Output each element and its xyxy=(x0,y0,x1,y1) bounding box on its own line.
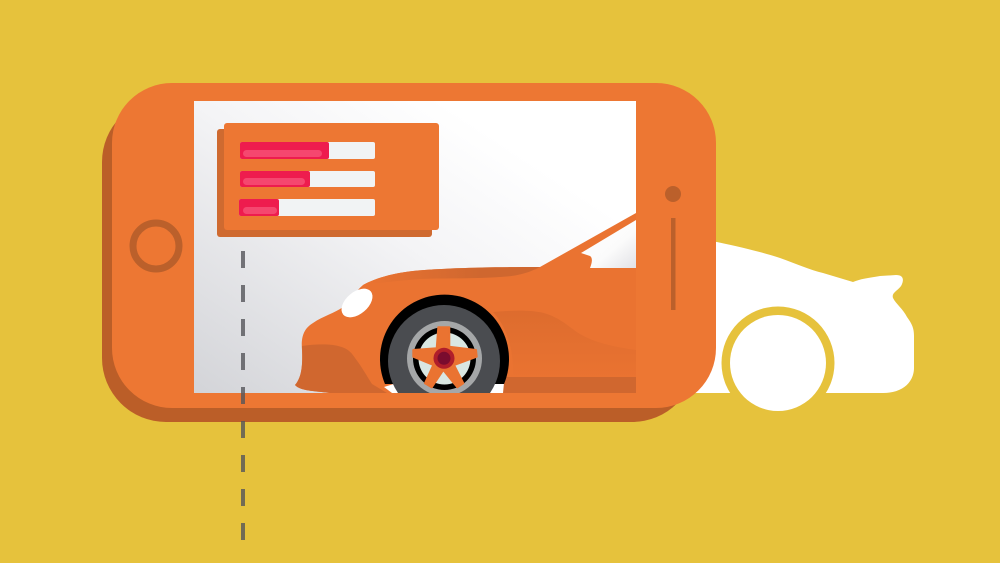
hub xyxy=(434,348,454,369)
data panel xyxy=(217,123,439,237)
phone xyxy=(102,83,716,422)
bar 3 xyxy=(239,199,375,216)
windshield glass xyxy=(606,237,636,268)
bar 1 xyxy=(240,142,375,159)
side shade xyxy=(494,310,582,336)
sill shade xyxy=(495,377,636,393)
spokes xyxy=(413,327,477,387)
home button xyxy=(133,223,179,269)
camera dot xyxy=(665,186,681,202)
panel face xyxy=(224,123,439,230)
car body xyxy=(295,213,636,393)
hood shade xyxy=(363,267,540,285)
orange car seen through screen xyxy=(295,213,636,393)
dashed pointer line xyxy=(241,251,245,541)
phone body xyxy=(112,83,716,408)
bar 2 xyxy=(240,171,375,187)
front bumper shade xyxy=(295,344,387,393)
white car silhouette: rear half xyxy=(690,240,914,420)
screen xyxy=(194,101,636,393)
rear wheel xyxy=(722,306,834,420)
front wheel xyxy=(380,294,509,393)
headlight xyxy=(342,288,372,318)
phone shadow xyxy=(102,98,696,422)
panel shadow xyxy=(217,129,432,237)
speaker line xyxy=(671,218,676,310)
